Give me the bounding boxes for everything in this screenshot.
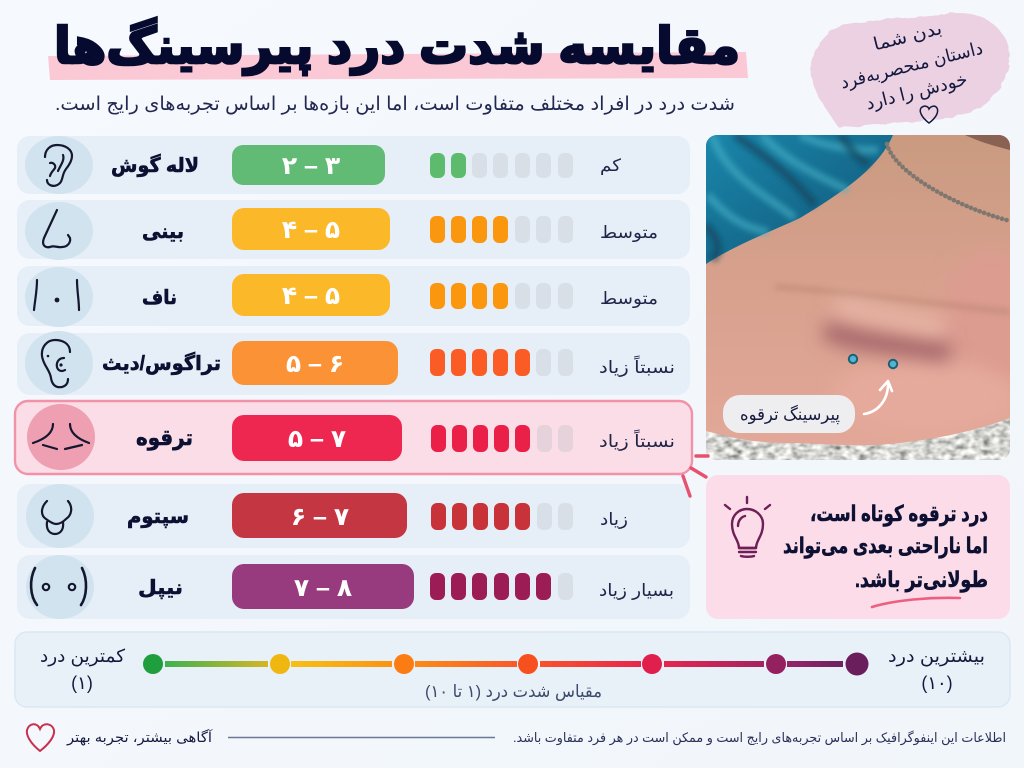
label: nose: بینی: [142, 221, 184, 243]
pain range pill: [232, 564, 414, 609]
necklace: [887, 144, 1010, 221]
label: ear lobe: لاله گوش: [111, 153, 199, 177]
callout: handwritten note: [811, 13, 1010, 127]
callout: collarbone tip: [706, 475, 1010, 619]
label: most pain: بیشترین درد: [888, 646, 985, 667]
pain meter: [430, 283, 573, 309]
pain meter: [430, 216, 573, 243]
pain range pill: [232, 145, 385, 185]
label: least pain: [40, 646, 125, 693]
label: collarbone: ترقوه: [136, 425, 193, 451]
tip text: [783, 501, 988, 593]
label: most pain: [888, 646, 985, 693]
pain range value: ۸ – ۷: [294, 574, 352, 602]
level text: متوسط: [600, 223, 658, 242]
label: tragus and daith: تراگوس/دیث: [102, 351, 221, 375]
footer slogan: آگاهی بیشتر، تجربه بهتر: [66, 729, 213, 746]
label: septum: سپتوم: [127, 506, 189, 529]
piercing studs: [848, 354, 898, 369]
panel: row nose: [17, 200, 690, 260]
pain range value: ۷ – ۵: [288, 425, 346, 453]
scale dots: [143, 652, 868, 676]
pain range pill: [232, 208, 390, 250]
footer note: اطلاعات این اینفوگرافیک بر اساس تجربه‌های رایج است و ممکن است در هر فرد متفاوت باشد.: [513, 730, 1006, 746]
level text: نسبتاً زیاد: [599, 354, 675, 377]
photo: collarbone piercing: [706, 135, 1024, 460]
panel: row septum: [17, 484, 690, 548]
label: least pain: کمترین درد: [40, 646, 125, 667]
pain range pill: [232, 274, 390, 316]
photo label: پیرسینگ ترقوه: [740, 404, 840, 425]
icon: collarbone: [33, 424, 89, 449]
hair: [706, 135, 893, 264]
pain meter: [431, 425, 573, 452]
callout: handwritten note: داستان منحصربه‌فرد: [838, 38, 985, 94]
arrow: [864, 381, 892, 414]
burst accent: [683, 456, 708, 496]
panel: row ear lobe: [17, 136, 690, 194]
callout: handwritten note: بدن شما: [871, 18, 944, 54]
panel: pain scale: [15, 632, 1010, 707]
panel: row tragus and daith: [17, 331, 690, 395]
icon: navel: [34, 280, 79, 310]
icon: septum: [42, 501, 71, 534]
pain range value: ۵ – ۴: [282, 282, 340, 310]
subtitle: شدت درد در افراد مختلف متفاوت است، اما این بازه‌ها بر اساس تجربه‌های رایج است.: [55, 94, 735, 115]
pain range value: ۳ – ۲: [282, 152, 340, 180]
label: navel: ناف: [142, 287, 177, 309]
icon: heart: [27, 724, 54, 751]
label: nipple: نیپل: [138, 577, 183, 600]
icon: nipple: [31, 568, 86, 605]
pain range pill: [232, 415, 402, 461]
pain range pill: [232, 341, 398, 385]
pain range pill: [232, 493, 407, 538]
panel: row collarbone highlighted: [15, 401, 692, 474]
sweater: [706, 418, 1010, 460]
icon: tragus ear: [42, 340, 70, 387]
underline stroke: [872, 598, 960, 607]
icon: light bulb: [725, 497, 770, 557]
pain range value: ۶ – ۵: [286, 350, 344, 378]
icon: ear: [45, 145, 72, 186]
panel: row nipple: [17, 555, 690, 619]
pain meter: [431, 503, 573, 530]
icon: nose: [43, 210, 70, 247]
pain meter: [430, 573, 573, 600]
panel: row navel: [17, 266, 690, 327]
pain meter: [430, 349, 573, 376]
level text: کم: [600, 156, 622, 176]
neck shadow: [965, 135, 1010, 150]
tip text: طولانی‌تر باشد.: [855, 567, 988, 593]
pain range value: ۵ – ۴: [282, 216, 340, 244]
level text: بسیار زیاد: [599, 581, 674, 600]
pain meter: [430, 153, 573, 178]
level text: متوسط: [600, 289, 658, 308]
scale caption: مقیاس شدت درد (۱ تا ۱۰): [425, 682, 602, 701]
scale line: [165, 661, 843, 667]
level text: نسبتاً زیاد: [599, 428, 675, 451]
title: مقایسه شدت درد پیرسینگ‌ها: [54, 17, 740, 76]
label: least pain: (۱): [71, 673, 93, 693]
photo label: [723, 395, 855, 433]
callout: handwritten note: خودش را دارد: [864, 69, 970, 114]
label: most pain: (۱۰): [921, 673, 953, 693]
pain range value: ۷ – ۶: [291, 503, 349, 531]
level text: زیاد: [600, 510, 628, 529]
